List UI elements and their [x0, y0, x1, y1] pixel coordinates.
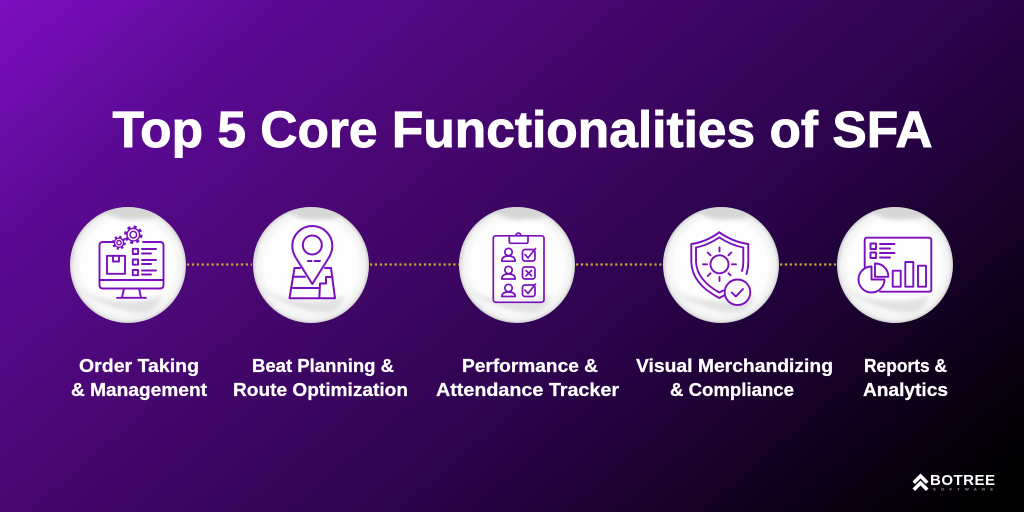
dotted connectors [187, 263, 836, 266]
step 3: attendance tracker [455, 207, 575, 323]
icon: map pin [290, 226, 335, 298]
label: performance: Performance & [462, 356, 598, 376]
step 4: visual merchandizing [659, 207, 779, 323]
icon: shield with sun and check [691, 232, 750, 305]
logo: botree software: SOFTWARE [933, 486, 993, 492]
label: reports: Analytics [863, 380, 948, 400]
label: visual merchandizing: & Compliance [670, 380, 794, 400]
label: performance: Attendance Tracker [436, 380, 619, 400]
step 2: beat planning [249, 207, 369, 323]
label: beat planning: Route Optimization [233, 380, 408, 400]
label: order taking: & Management [71, 380, 207, 400]
title: Top 5 Core Functionalities of SFA [112, 101, 932, 158]
label: order taking [71, 356, 207, 400]
label: visual merchandizing [636, 356, 833, 400]
logo: botree software: BOTREE [930, 472, 995, 489]
label: visual merchandizing: Visual Merchandizing [636, 356, 833, 376]
label: beat planning: Beat Planning & [252, 356, 394, 376]
label: reports [863, 356, 948, 400]
label: order taking: Order Taking [79, 356, 199, 376]
icon: dashboard with chart [859, 238, 931, 292]
icon: clipboard [493, 233, 544, 302]
step 1: order taking [66, 207, 186, 323]
icon: monitor with gears [100, 227, 164, 298]
step 5: reports [833, 207, 953, 323]
logo: botree software [912, 472, 995, 492]
label: reports: Reports & [864, 356, 947, 376]
label: performance [436, 356, 619, 400]
label: beat planning [233, 356, 408, 400]
